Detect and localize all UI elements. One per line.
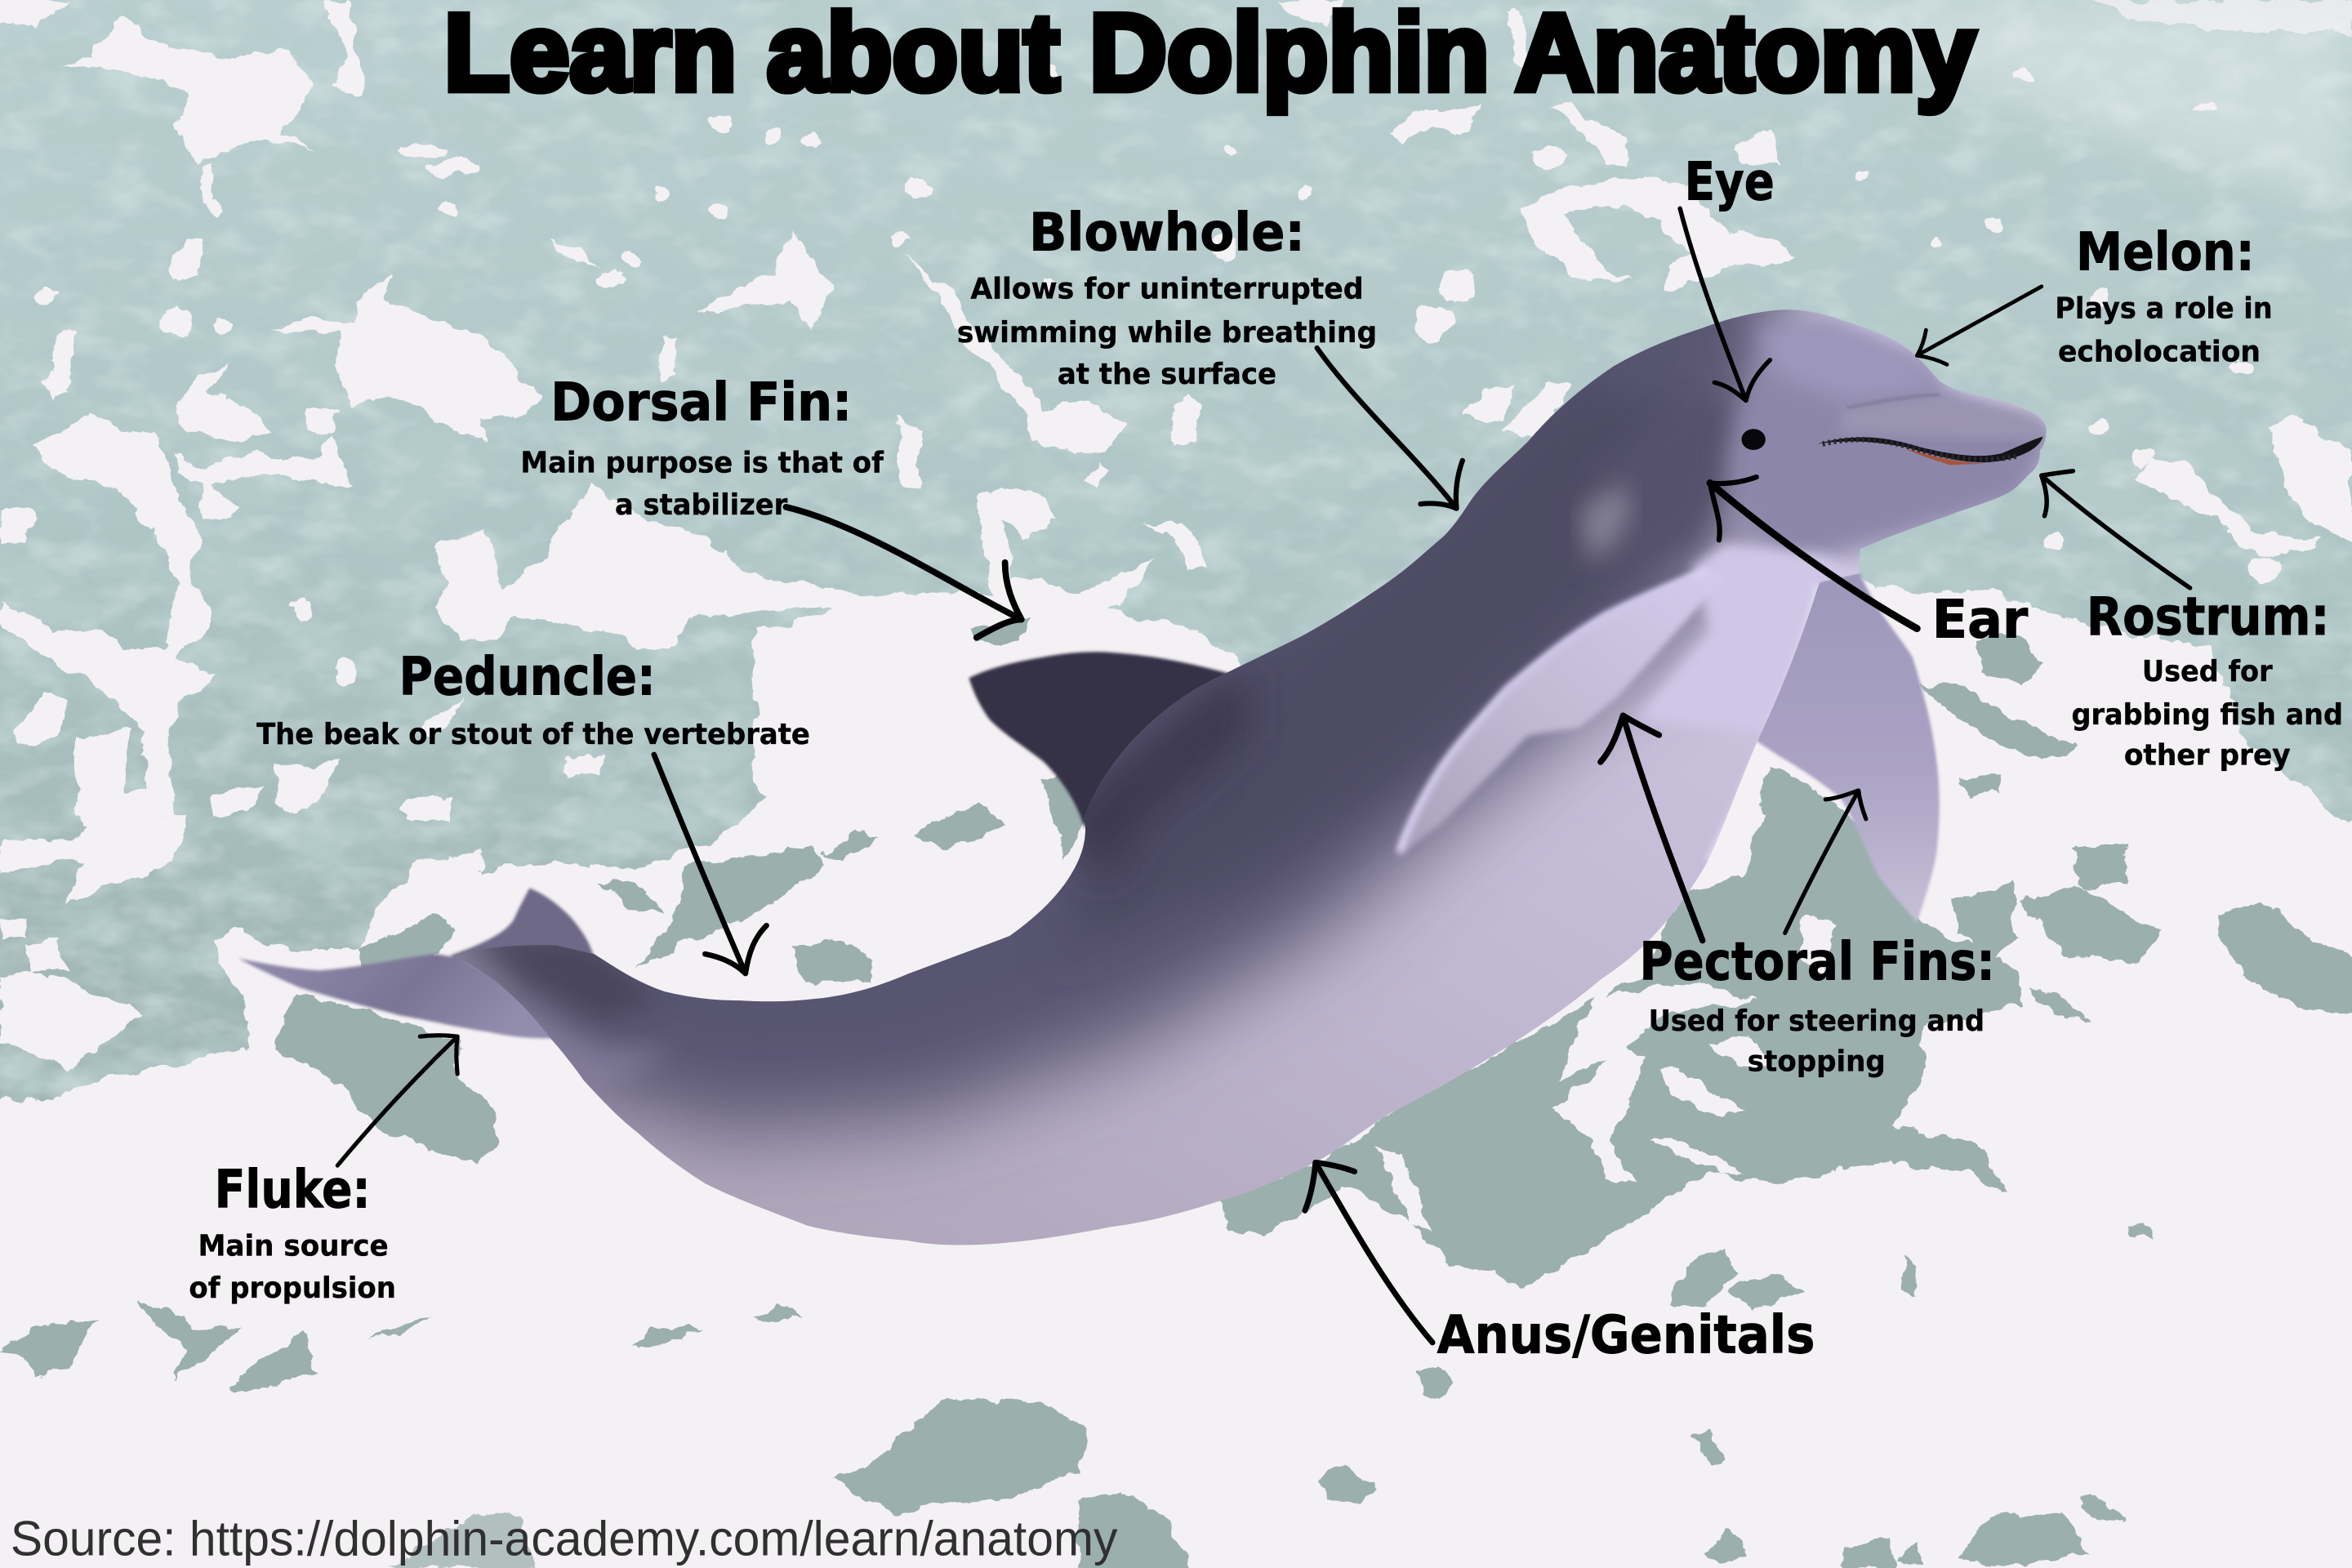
source note: Source: https://dolphin-academy.com/learn/anatomy xyxy=(11,1511,1118,1566)
label: blowhole: Allows for uninterrupted xyxy=(970,273,1364,306)
label: melon: Melon: xyxy=(2076,222,2255,283)
label: fluke: Fluke: xyxy=(215,1160,371,1221)
label: eye: Eye xyxy=(1685,151,1775,212)
label: fluke xyxy=(189,1036,457,1305)
near pectoral fin xyxy=(1396,570,1725,858)
label: eye xyxy=(1680,151,1775,400)
label: anus and genitals xyxy=(1305,1162,1815,1366)
label: peduncle xyxy=(256,646,810,973)
label: peduncle: The beak or stout of the vertebrate xyxy=(256,718,810,751)
throat and chest highlight xyxy=(1635,543,1860,735)
label: dorsal fin: a stabilizer xyxy=(615,488,788,522)
label: fluke: Main source xyxy=(198,1229,389,1263)
label: melon: echolocation xyxy=(2058,336,2261,369)
label: dorsal fin: Dorsal Fin: xyxy=(550,372,852,433)
dolphin illustration xyxy=(238,225,2070,1275)
label: blowhole: Blowhole: xyxy=(1029,203,1305,264)
label: pectoral fins xyxy=(1601,715,1995,1078)
label: peduncle: Peduncle: xyxy=(399,646,656,707)
label: dorsal fin xyxy=(520,372,1022,638)
head shading xyxy=(1725,323,2063,567)
label: anus and genitals: Anus/Genitals xyxy=(1437,1305,1815,1366)
label: pectoral fins: Pectoral Fins: xyxy=(1640,931,1995,992)
label: rostrum: other prey xyxy=(2124,739,2291,773)
eye xyxy=(1741,429,1766,450)
dorsal fin xyxy=(969,652,1245,828)
dolphin body xyxy=(454,310,2047,1245)
mouth xyxy=(1816,436,2043,465)
label: melon: Plays a role in xyxy=(2055,292,2273,325)
label: fluke: of propulsion xyxy=(189,1272,396,1305)
label: ear xyxy=(1710,477,2029,651)
label: blowhole xyxy=(957,203,1463,509)
label: rostrum: Rostrum: xyxy=(2087,586,2329,648)
label: blowhole: at the surface xyxy=(1058,358,1276,391)
label: blowhole: swimming while breathing xyxy=(957,316,1377,350)
chest center line highlight xyxy=(1710,585,1820,862)
label: dorsal fin: Main purpose is that of xyxy=(520,447,884,480)
far pectoral fin xyxy=(1725,573,1940,923)
dark dorsal shading xyxy=(390,225,1800,1133)
fluke lobes xyxy=(238,888,594,1038)
label: pectoral fins: Used for steering and xyxy=(1649,1004,1984,1038)
label: rostrum: Used for xyxy=(2142,655,2273,688)
label: rostrum xyxy=(2042,471,2343,773)
label: ear: Ear xyxy=(1932,590,2029,651)
label: melon xyxy=(1917,222,2273,369)
rostrum crease xyxy=(1846,394,1940,408)
label: pectoral fins: stopping xyxy=(1748,1045,1886,1078)
